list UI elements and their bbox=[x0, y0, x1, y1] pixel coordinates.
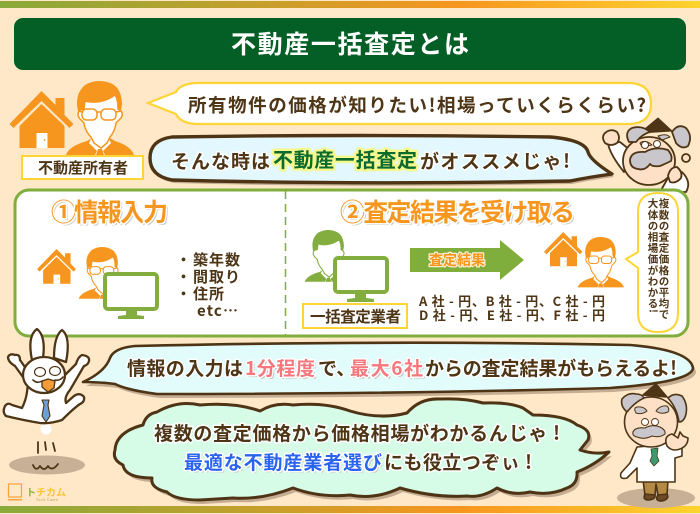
speech bubble: professor conclusion: 最適な不動産業者選び bbox=[184, 448, 382, 475]
speech bubble: owner question bbox=[148, 83, 651, 124]
list: input items: ・ bbox=[176, 266, 191, 287]
arrow: appraisal result: 査定結果 bbox=[429, 250, 485, 270]
list: input items: 住所 bbox=[193, 283, 224, 304]
speech bubble: professor conclusion bbox=[114, 399, 612, 504]
speech bubble: rabbit info: 1分程度 bbox=[245, 354, 315, 381]
arrow: appraisal result bbox=[410, 240, 524, 280]
logo: チカム bbox=[36, 484, 66, 499]
speech bubble: recommendation: そんな時は bbox=[171, 147, 270, 174]
heading: step 2: ②査定結果を受け取る bbox=[342, 195, 577, 231]
icon: house result bbox=[544, 232, 582, 266]
heading: step 1: ①情報入力 bbox=[51, 193, 168, 229]
speech bubble: rabbit info bbox=[83, 343, 696, 398]
icon: small house bbox=[37, 249, 76, 284]
speech bubble: rabbit info: で、 bbox=[318, 354, 355, 381]
speech bubble: rabbit info: 情報の入力は bbox=[127, 354, 243, 381]
heading: step 2: ②査定結果を受け取る bbox=[340, 193, 575, 229]
speech bubble: recommendation bbox=[150, 136, 614, 186]
heading: step 1: ①情報入力 bbox=[53, 195, 170, 231]
logo: Toch Came bbox=[36, 498, 58, 503]
callout: average price note: 複数の査定価格の平均で bbox=[656, 197, 672, 320]
character: rabbit bbox=[4, 329, 89, 474]
text: company results: D 社 - 円、E 社 - 円、F 社 - 円 bbox=[419, 305, 605, 324]
text: company results: A 社 - 円、B 社 - 円、C 社 - 円 bbox=[418, 291, 605, 310]
icon: large house bbox=[10, 91, 74, 148]
list: input items: 築年数 bbox=[193, 249, 240, 270]
logo: ト bbox=[26, 484, 36, 499]
panel: process bbox=[15, 190, 688, 336]
speech bubble: owner question: 所有物件の価格が知りたい!相場っていくらくらい? bbox=[188, 92, 646, 118]
character: professor OK sign bbox=[617, 384, 695, 508]
speech bubble: professor conclusion: にも役立つぞぃ ! bbox=[384, 448, 532, 475]
list: input items: ・ bbox=[176, 249, 191, 270]
speech bubble: professor conclusion: 最適な不動産業者選び bbox=[186, 450, 384, 477]
top gradient band bbox=[0, 1, 700, 8]
list: input items bbox=[176, 249, 240, 321]
character: professor pointing up bbox=[603, 118, 690, 192]
label: appraisal company: 一括査定業者 bbox=[310, 305, 401, 327]
icon: property owner bbox=[66, 81, 134, 155]
icon: appraiser at computer bbox=[305, 230, 387, 302]
arrow: appraisal result: 査定結果 bbox=[430, 251, 486, 271]
label: property owner: 不動産所有者 bbox=[38, 157, 128, 178]
icon: person at computer bbox=[79, 247, 157, 319]
speech bubble: rabbit info: 1分程度 bbox=[247, 356, 317, 383]
bottom gradient band bbox=[0, 506, 700, 513]
speech bubble: rabbit info: からの査定結果がもらえるよ! bbox=[425, 354, 677, 381]
icon: owner result bbox=[578, 237, 624, 287]
speech bubble: rabbit info: 最大6社 bbox=[352, 356, 425, 383]
list: input items: ・ bbox=[176, 283, 191, 304]
title banner bbox=[14, 18, 686, 70]
label: property owner bbox=[22, 156, 143, 179]
callout: average price note bbox=[626, 193, 678, 332]
speech bubble: rabbit info: 最大6社 bbox=[350, 354, 423, 381]
list: input items: etc… bbox=[197, 300, 238, 321]
speech bubble: recommendation: 不動産一括査定 bbox=[273, 144, 417, 173]
list: input items: 間取り bbox=[193, 266, 240, 287]
text: company results bbox=[418, 291, 605, 324]
logo bbox=[8, 484, 66, 503]
callout: average price note: 大体の相場価がわかる! bbox=[646, 197, 660, 314]
speech bubble: recommendation: がオススメじゃ! bbox=[420, 147, 570, 174]
title banner: 不動産一括査定とは bbox=[231, 25, 469, 61]
speech bubble: professor conclusion: 複数の査定価格から価格相場がわかるんじゃ ! bbox=[154, 419, 560, 446]
